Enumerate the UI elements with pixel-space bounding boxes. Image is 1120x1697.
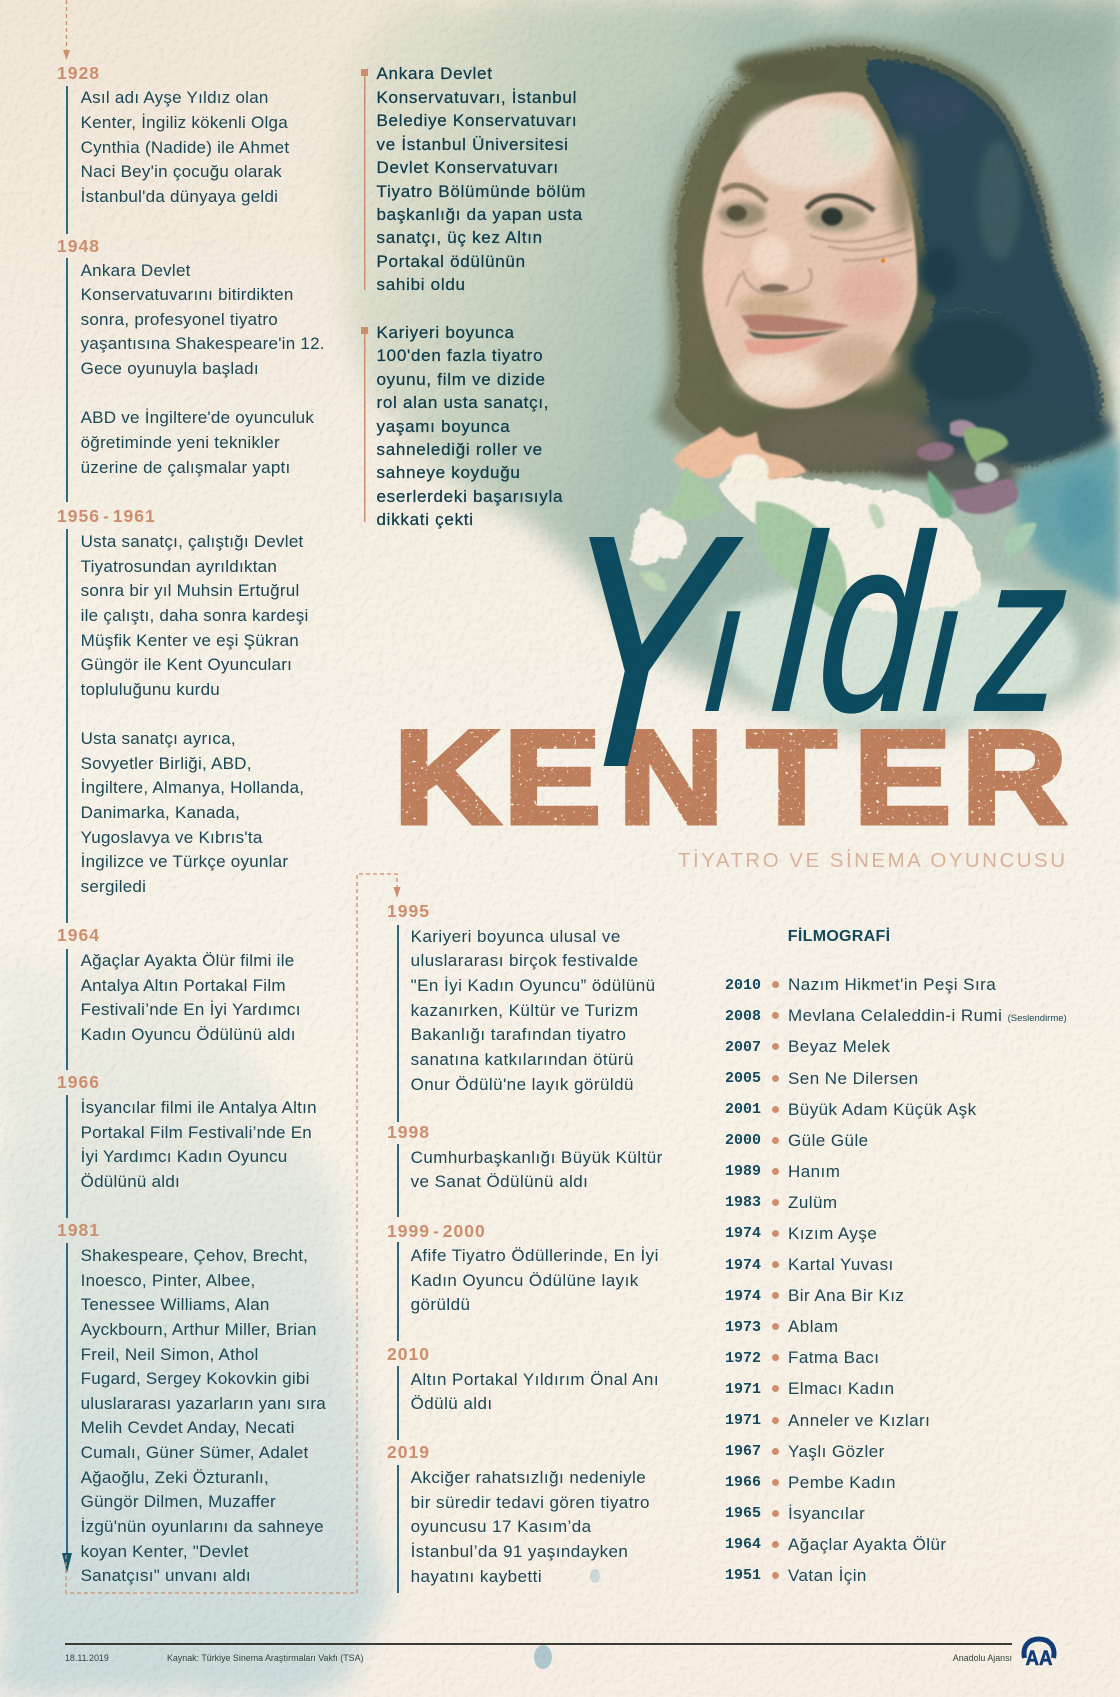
entry 1999-2000: 1999-2000 — [387, 1221, 486, 1241]
entry 1998: Cumhurbaşkanlığı Büyük Kültür — [411, 1148, 663, 1167]
dark neck hair — [767, 402, 1113, 500]
entry 2019 — [387, 1442, 650, 1593]
entry 1998: ve Sanat Ödülünü aldı — [411, 1172, 588, 1191]
pale wash under flowers — [719, 576, 1078, 724]
entry 1948 — [57, 236, 325, 502]
highlight: conservatory and awards — [361, 64, 586, 294]
entry 1981: Fugard, Sergey Kokovkin gibi — [81, 1369, 310, 1388]
source: Kaynak: Türkiye Sinema Araştırmaları Vakfı (TSA) — [167, 1652, 363, 1662]
highlight: career: oyunu, film ve dizide — [376, 370, 546, 389]
entry 1999-2000: Kadın Oyuncu Ödülüne layık — [411, 1271, 639, 1290]
highlight: conservatory and awards: başkanlığı da yapan usta — [376, 205, 583, 224]
entry 1995 — [387, 901, 656, 1122]
entry 1966: Portakal Film Festivali’nde En — [81, 1123, 312, 1142]
entry 1981: Shakespeare, Çehov, Brecht, — [81, 1246, 308, 1265]
film list: 1973 — [725, 1319, 761, 1336]
Yıldız script wordmark: ı — [697, 542, 751, 750]
nose — [727, 236, 812, 306]
agency name: Anadolu Ajansı — [953, 1652, 1012, 1662]
KENTER wordmark: KENTER — [394, 702, 1067, 852]
entry 1956-1961: sonra bir yıl Muhsin Ertuğrul — [81, 581, 299, 600]
entry 1928: Naci Bey'in çocuğu olarak — [81, 162, 282, 181]
entry 1948: Konservatuvarını bitirdikten — [81, 285, 294, 304]
entry 1995: sanatına katkılarından ötürü — [411, 1050, 634, 1069]
entry 1956-1961: ile çalıştı, daha sonra kardeşi — [81, 606, 309, 625]
face — [703, 92, 917, 409]
Yıldız script wordmark: l — [765, 484, 832, 763]
entry 1928: İstanbul'da dünyaya geldi — [81, 187, 278, 206]
film list: Elmacı Kadın — [788, 1379, 895, 1398]
entry 2010: Ödülü aldı — [411, 1394, 493, 1413]
film list: Ağaçlar Ayakta Ölür — [788, 1535, 946, 1554]
entry 1981 — [57, 1220, 326, 1585]
entry 1956-1961: Usta sanatçı ayrıca, — [81, 729, 236, 748]
highlight: career: sahneye koyduğu — [376, 463, 521, 482]
entry 1999-2000: görüldü — [411, 1295, 470, 1314]
highlight: career: Kariyeri boyunca — [376, 323, 515, 342]
entry 1964: Ağaçlar Ayakta Ölür filmi ile — [81, 951, 294, 970]
entry 1981: koyan Kenter, "Devlet — [81, 1542, 249, 1561]
entry 1995: Bakanlığı tarafından tiyatro — [411, 1025, 626, 1044]
film list: 1971 — [725, 1412, 761, 1429]
film list: Ablam — [788, 1317, 838, 1336]
highlight: career: eserlerdeki başarısıyla — [376, 487, 563, 506]
entry 1928: 1928 — [57, 63, 100, 83]
panel: highlight texts — [361, 64, 586, 529]
entry 1948: 1948 — [57, 236, 100, 256]
hair strands — [669, 54, 1003, 321]
entry 1999-2000: Afife Tiyatro Ödüllerinde, En İyi — [411, 1246, 659, 1265]
entry 2019: 2019 — [387, 1442, 430, 1462]
entry 1948: üzerine de çalışmalar yaptı — [81, 458, 290, 477]
entry 2019: İstanbul’da 91 yaşındayken — [411, 1542, 628, 1561]
entry 1948: sonra, profesyonel tiyatro — [81, 310, 278, 329]
entry 1995: "En İyi Kadın Oyuncu” ödülünü — [411, 976, 656, 995]
entry 1998: 1998 — [387, 1122, 430, 1142]
column: later career timeline — [387, 901, 663, 1593]
film list: Beyaz Melek — [788, 1037, 890, 1056]
entry 1948: Gece oyunuyla başladı — [81, 359, 259, 378]
lilac blossoms — [917, 420, 1018, 514]
entry 1981: uluslararası yazarların yanı sıra — [81, 1394, 326, 1413]
film list: 1974 — [725, 1256, 761, 1274]
film list: Sen Ne Dilersen — [788, 1068, 919, 1088]
highlight: career: 100'den fazla tiyatro — [376, 346, 543, 365]
entry 1956-1961: Müşfik Kenter ve eşi Şükran — [81, 631, 299, 650]
entry 1999-2000 — [387, 1221, 659, 1341]
entry 1964 — [57, 925, 301, 1070]
entry 1981: Güngör Dilmen, Muzaffer — [81, 1492, 276, 1511]
Yıldız script wordmark: Y — [542, 467, 750, 835]
entry 1981: Freil, Neil Simon, Athol — [81, 1345, 259, 1364]
entry 1956-1961: sergiledi — [81, 877, 146, 896]
film list: Güle Güle — [788, 1131, 869, 1150]
entry 1956-1961: Sovyetler Birliği, ABD, — [81, 754, 252, 773]
entry 1995: uluslararası birçok festivalde — [411, 951, 639, 970]
entry 1995: Kariyeri boyunca ulusal ve — [411, 927, 621, 946]
entry 1956-1961: İngilizce ve Türkçe oyunlar — [81, 852, 288, 871]
film list: Anneler ve Kızları — [788, 1410, 930, 1430]
entry 1966: 1966 — [57, 1072, 100, 1092]
highlight: conservatory and awards: Devlet Konservatuvarı — [376, 158, 559, 177]
subtitle: TİYATRO VE SİNEMA OYUNCUSU — [678, 849, 1065, 872]
film list: Mevlana Celaleddin-i Rumi (Seslendirme) — [788, 1006, 1067, 1025]
hair — [653, 39, 1110, 478]
entry 1956-1961: topluluğunu kurdu — [81, 680, 220, 699]
entry 1981: Ayckbourn, Arthur Miller, Brian — [81, 1320, 317, 1339]
film list: 1974 — [725, 1225, 761, 1242]
panel: filmography — [725, 928, 1067, 1585]
film list: 1989 — [725, 1163, 761, 1180]
leaves — [640, 467, 1037, 620]
entry 1956-1961: Yugoslavya ve Kıbrıs'ta — [81, 828, 263, 847]
entry 2010: 2010 — [387, 1344, 430, 1364]
entry 2010 — [387, 1344, 659, 1440]
film list: 1972 — [725, 1350, 761, 1367]
eyes and brows — [719, 185, 913, 261]
highlight: conservatory and awards: Portakal ödülünün — [376, 252, 526, 271]
film list: İsyancılar — [788, 1504, 865, 1523]
film list: 1965 — [725, 1505, 761, 1522]
film list: Kızım Ayşe — [788, 1224, 877, 1243]
entry 1981: 1981 — [57, 1220, 100, 1240]
film list: 1983 — [725, 1194, 761, 1211]
entry 1956-1961: Tiyatrosundan ayrıldıktan — [81, 557, 277, 576]
entry 2019: oyuncusu 17 Kasım’da — [411, 1517, 592, 1536]
entry 1981: Cumalı, Güner Sümer, Adalet — [81, 1443, 308, 1462]
entry 1928: Kenter, İngiliz kökenli Olga — [81, 113, 288, 132]
highlight: conservatory and awards: sahibi oldu — [376, 275, 466, 294]
entry 1956-1961: Güngör ile Kent Oyuncuları — [81, 655, 292, 674]
film list — [725, 975, 1067, 1585]
entry 1964: Kadın Oyuncu Ödülünü aldı — [81, 1025, 296, 1044]
film list: 1966 — [725, 1474, 761, 1491]
entry 1964: Festivali’nde En İyi Yardımcı — [81, 1000, 301, 1019]
film list: 1967 — [725, 1443, 761, 1460]
date: 18.11.2019 — [65, 1652, 109, 1662]
arrow: timeline end — [62, 1553, 72, 1573]
highlight: career — [361, 323, 563, 529]
film list: Hanım — [788, 1162, 840, 1181]
entry 1948: yaşantısına Shakespeare'in 12. — [81, 334, 325, 353]
entry 2019: Akciğer rahatsızlığı nedeniyle — [411, 1468, 646, 1487]
Yıldız script wordmark: ı — [915, 542, 969, 750]
footer — [65, 1636, 1056, 1666]
film list: 1951 — [725, 1567, 761, 1584]
film list: 2010 — [725, 977, 761, 994]
entry 1995: 1995 — [387, 901, 430, 921]
highlight: conservatory and awards: Ankara Devlet — [376, 64, 493, 83]
heading: FİLMOGRAFİ — [788, 928, 890, 944]
Yıldız script wordmark: d — [811, 484, 941, 763]
highlight: conservatory and awards: Konservatuvarı, İstanbul — [376, 88, 577, 107]
entry 1966: Ödülünü aldı — [81, 1172, 180, 1191]
film list: 1974 — [725, 1288, 761, 1305]
entry 1981: İzgü'nün oyunlarını da sahneye — [81, 1517, 324, 1536]
icon: AA logo — [1022, 1636, 1056, 1666]
teal wash at right — [630, 402, 1120, 724]
entry 1995: Onur Ödülü'ne layık görüldü — [411, 1075, 634, 1094]
highlight: career: dikkati çekti — [376, 510, 474, 529]
top dashed arrow — [63, 0, 70, 60]
entry 2010: Altın Portakal Yıldırım Önal Anı — [411, 1370, 659, 1389]
white flowers — [630, 465, 981, 612]
film list: Bir Ana Bir Kız — [788, 1286, 904, 1305]
column: early life timeline: Sanatçısı" unvanı aldı — [81, 1566, 251, 1585]
highlight: career: yaşamı boyunca — [376, 417, 510, 436]
mouth — [735, 295, 850, 354]
Yıldız script wordmark: z — [970, 507, 1074, 759]
entry 1998 — [387, 1122, 663, 1217]
film list: 2005 — [725, 1070, 761, 1087]
entry 1981: Melih Cevdet Anday, Necati — [81, 1418, 295, 1437]
film list: 1971 — [725, 1381, 761, 1398]
entry 2019: hayatını kaybetti — [411, 1567, 542, 1586]
entry 1956-1961: İngiltere, Almanya, Hollanda, — [81, 778, 304, 797]
entry 1966 — [57, 1072, 317, 1218]
column: early life timeline — [57, 0, 326, 1585]
entry 1981: Inoesco, Pinter, Albee, — [81, 1271, 256, 1290]
highlight: conservatory and awards: ve İstanbul Üniversitesi — [376, 135, 569, 154]
entry 1948: öğretiminde yeni teknikler — [81, 433, 280, 452]
film list: 1964 — [725, 1536, 761, 1553]
entry 1956-1961: Danimarka, Kanada, — [81, 803, 240, 822]
entry 1948: ABD ve İngiltere'de oyunculuk — [81, 408, 314, 427]
entry 1964: Antalya Altın Portakal Film — [81, 976, 286, 995]
film list: 2000 — [725, 1132, 761, 1149]
highlight: conservatory and awards: Tiyatro Bölümünde bölüm — [376, 182, 586, 201]
entry 1966: İsyancılar filmi ile Antalya Altın — [81, 1098, 317, 1117]
entry 1948: Ankara Devlet — [81, 261, 191, 280]
film list: 2001 — [725, 1101, 761, 1118]
film list: Pembe Kadın — [788, 1473, 896, 1492]
highlight: conservatory and awards: Belediye Konservatuvarı — [376, 111, 577, 130]
highlight: career: rol alan usta sanatçı, — [376, 393, 549, 412]
film list: 2007 — [725, 1039, 761, 1056]
entry 1966: İyi Yardımcı Kadın Oyuncu — [81, 1147, 287, 1166]
entry 1956-1961: Usta sanatçı, çalıştığı Devlet — [81, 532, 304, 551]
entry 1981: Ağaoğlu, Zeki Özturanlı, — [81, 1468, 269, 1487]
film list: Zulüm — [788, 1193, 837, 1212]
film list: Fatma Bacı — [788, 1348, 879, 1367]
highlight: conservatory and awards: sanatçı, üç kez Altın — [376, 228, 543, 247]
entry 2019: bir süredir tedavi gören tiyatro — [411, 1493, 650, 1512]
peach flower — [673, 427, 807, 480]
entry 1928: Cynthia (Nadide) ile Ahmet — [81, 138, 289, 157]
dashed connector between columns — [65, 873, 400, 1594]
film list: Yaşlı Gözler — [788, 1442, 885, 1460]
film list: 2008 — [725, 1008, 761, 1025]
entry 1956-1961 — [57, 506, 309, 923]
entry 1956-1961: 1956-1961 — [57, 506, 156, 526]
highlight: career: sahnelediği roller ve — [376, 440, 543, 459]
film list: Vatan İçin — [788, 1566, 867, 1585]
entry 1928 — [57, 63, 289, 234]
film list: Kartal Yuvası — [788, 1255, 894, 1274]
entry 1995: kazanırken, Kültür ve Turizm — [411, 1001, 639, 1020]
entry 1981: Tenessee Williams, Alan — [81, 1295, 270, 1314]
entry 1928: Asıl adı Ayşe Yıldız olan — [81, 88, 269, 107]
entry 1964: 1964 — [57, 925, 100, 945]
film list: Büyük Adam Küçük Aşk — [788, 1100, 977, 1118]
film list: Nazım Hikmet'in Peşi Sıra — [788, 975, 996, 994]
